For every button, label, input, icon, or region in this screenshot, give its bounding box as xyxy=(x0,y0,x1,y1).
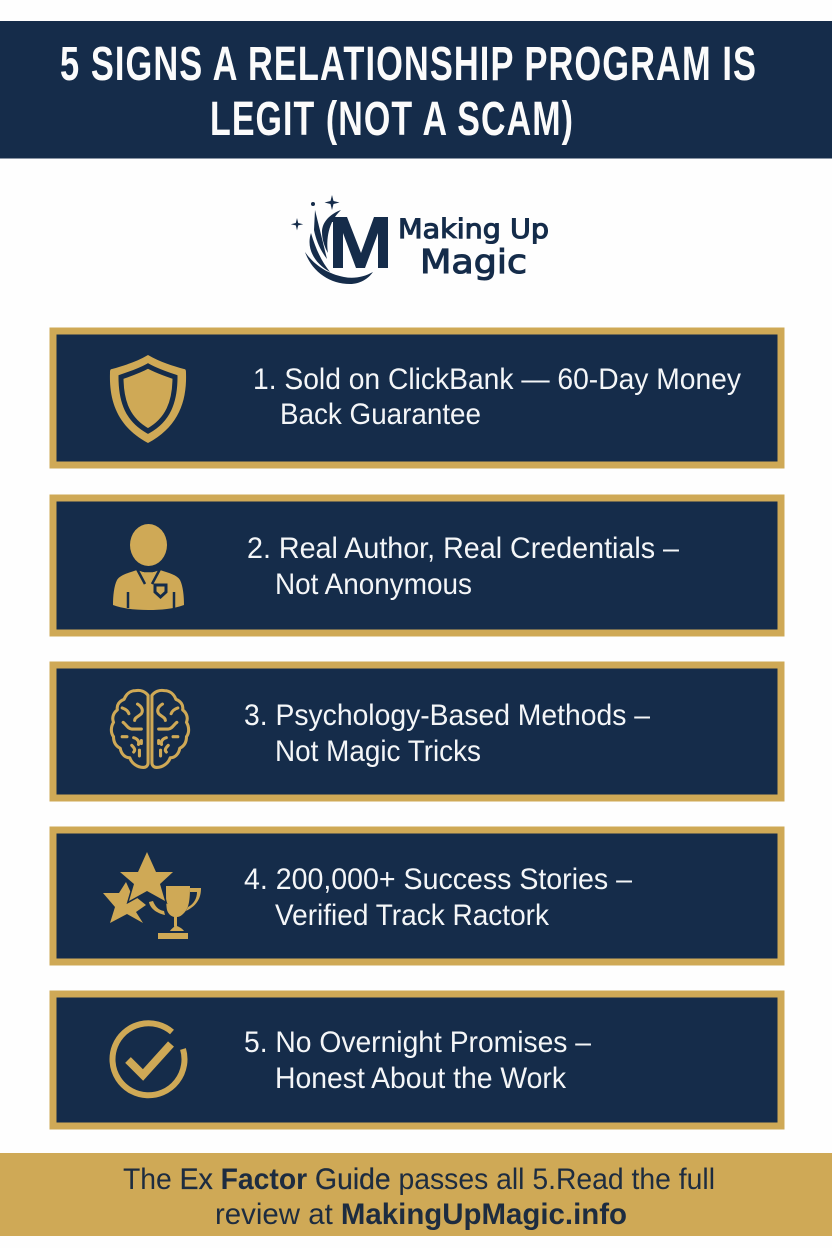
sign 2 text: 2. Real Author, Real Credentials – xyxy=(247,532,679,565)
logo wordmark: Making Up xyxy=(398,214,549,245)
sign 4 text: 4. 200,000+ Success Stories – xyxy=(244,863,632,896)
footer text xyxy=(123,1163,715,1231)
panel: sign 1 xyxy=(53,331,781,465)
logo icon: M with swooshes and sparkles xyxy=(291,195,388,284)
sign 3 text: Not Magic Tricks xyxy=(275,735,481,768)
sign 1 text: 1. Sold on ClickBank — 60-Day Money xyxy=(253,363,741,396)
left hemisphere xyxy=(111,690,148,767)
sign 2 text: Not Anonymous xyxy=(275,568,472,601)
sign 5 text: 5. No Overnight Promises – xyxy=(244,1026,591,1059)
panel: sign 4 xyxy=(53,830,781,962)
footer text: The Ex Factor Guide passes all 5.Read the full xyxy=(123,1163,715,1196)
panel: sign 5 xyxy=(53,994,781,1126)
sign 1 text xyxy=(253,363,741,431)
icon: stars and trophy xyxy=(103,852,201,939)
right hemisphere xyxy=(152,690,189,767)
icon: person with badge xyxy=(113,524,184,610)
sign 5 text xyxy=(244,1026,591,1095)
sign 5 text: Honest About the Work xyxy=(275,1062,567,1095)
footer banner xyxy=(0,1153,832,1236)
footer text: review at MakingUpMagic.info xyxy=(215,1198,627,1231)
title text: LEGIT (NOT A SCAM) xyxy=(210,93,574,146)
sign 4 text: Verified Track Ractork xyxy=(275,899,550,932)
sign 2 text xyxy=(247,532,679,601)
sign 3 text xyxy=(244,699,650,768)
logo wordmark xyxy=(398,214,549,281)
title banner xyxy=(0,21,832,158)
sign 1 text: Back Guarantee xyxy=(280,398,481,431)
icon: shield xyxy=(110,355,186,443)
sign 3 text: 3. Psychology-Based Methods – xyxy=(244,699,650,732)
title text xyxy=(60,38,757,146)
logo wordmark: Magic xyxy=(420,242,527,281)
panel: sign 2 xyxy=(53,498,781,633)
logo: Making Up Magic xyxy=(291,195,549,284)
sign 4 text xyxy=(244,863,632,932)
panel: sign 3 xyxy=(53,665,781,798)
icon: brain xyxy=(111,690,189,767)
icon: check in circle xyxy=(112,1023,184,1095)
